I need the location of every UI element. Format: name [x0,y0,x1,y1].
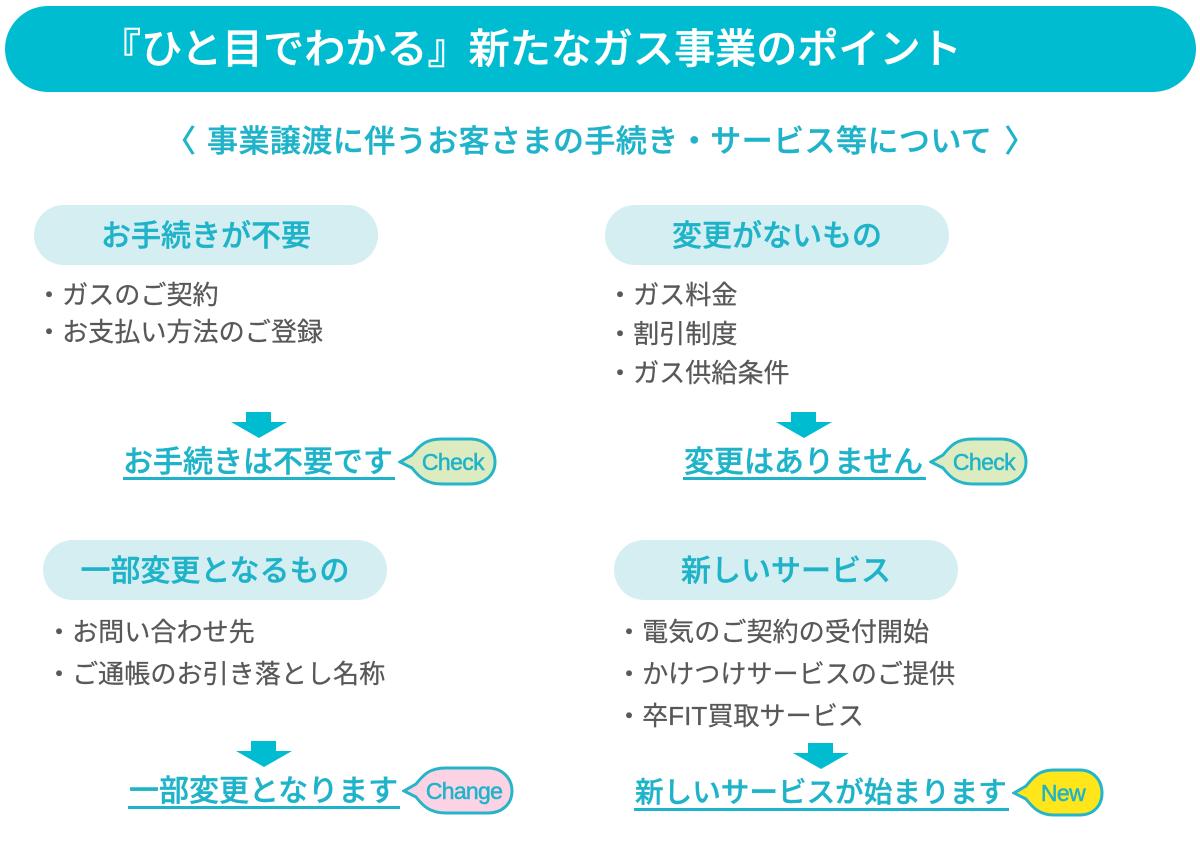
badge: Check [929,438,1028,486]
badge: Check: Check [422,449,485,475]
list: no changes: ・ガス料金 [607,280,737,310]
badge: New [1012,768,1104,816]
badge: Change [402,766,514,814]
list: new services [616,617,955,731]
list: no changes: ・割引制度 [607,319,737,349]
title text: 『ひと目でわかる』新たなガス事業のポイント [100,26,962,72]
subtitle: 事業譲渡に伴うお客さまの手続き・サービス等について [207,124,992,159]
list: no procedure needed: ・ガスのご契約 [36,280,219,310]
heading: no changes [605,205,949,265]
badge: Change: Change [426,778,502,804]
heading: new services: 新しいサービス [681,555,891,588]
subtitle: 〉 [1004,124,1036,159]
result text: 一部変更となります [129,775,398,808]
arrow [793,743,849,769]
heading: partial changes: 一部変更となるもの [80,555,350,588]
arrow [776,412,832,438]
badge: New: New [1041,780,1086,806]
result text: 変更はありません [684,446,923,479]
panel: no procedure needed [34,205,496,486]
list: new services: ・卒FIT買取サービス [616,701,864,731]
arrow [236,741,292,767]
list: no procedure needed [36,280,323,347]
list: no procedure needed: ・お支払い方法のご登録 [36,317,323,347]
heading: no procedure needed: お手続きが不要 [101,220,311,253]
badge: Check [398,438,496,486]
list: new services: ・かけつけサービスのご提供 [616,659,955,689]
arrow [231,412,287,438]
panel: new services [614,540,1104,816]
heading: new services [614,540,958,600]
subtitle: 〈 [165,124,196,159]
heading: no procedure needed [34,205,378,265]
panel: partial changes [43,540,514,814]
list: no changes: ・ガス供給条件 [607,358,790,388]
panel: no changes [605,205,1028,486]
list: partial changes: ・お問い合わせ先 [46,617,255,647]
title banner [5,6,1196,92]
list: no changes [607,280,790,388]
list: partial changes [46,617,385,689]
heading: partial changes [43,540,387,600]
list: partial changes: ・ご通帳のお引き落とし名称 [46,659,385,689]
heading: no changes: 変更がないもの [672,220,882,253]
list: new services: ・電気のご契約の受付開始 [616,617,929,647]
badge: Check: Check [953,449,1016,475]
result text: 新しいサービスが始まります [635,777,1007,809]
result text: お手続きは不要です [123,446,393,479]
